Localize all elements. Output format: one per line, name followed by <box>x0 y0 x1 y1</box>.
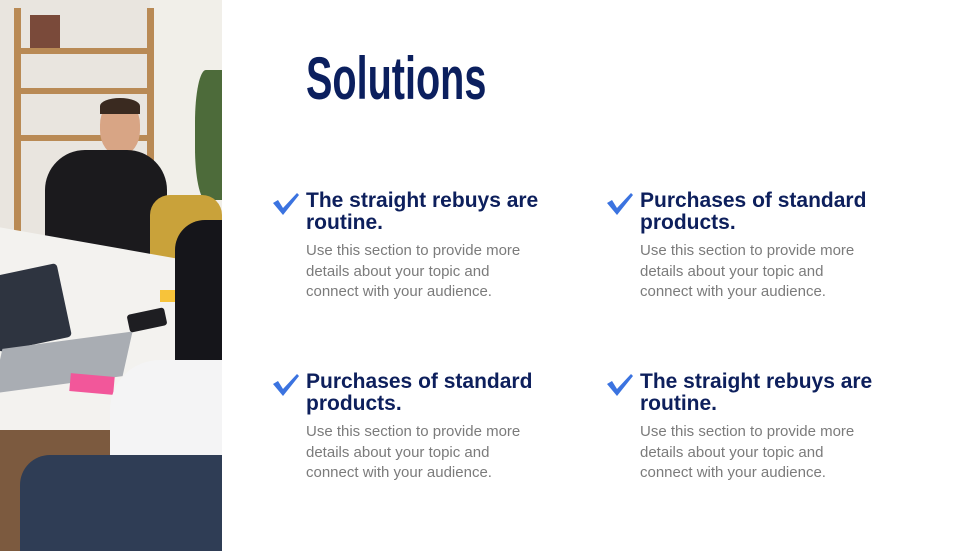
item: top left <box>273 189 538 300</box>
photo: team meeting <box>0 0 222 551</box>
title: Solutions <box>306 45 486 112</box>
item: top left: The straight rebuys are routine. <box>306 189 538 234</box>
item: top right <box>607 189 866 300</box>
item: bottom right: The straight rebuys are routine. <box>640 370 872 415</box>
item: top right: Use this section to provide more details about your topic and connect with your audience. <box>640 242 854 300</box>
item: bottom left <box>273 370 532 481</box>
item: top right: Purchases of standard products. <box>640 189 866 234</box>
icon: check <box>273 374 299 396</box>
icon: check <box>607 374 633 396</box>
item: bottom right: Use this section to provide more details about your topic and connect with your audience. <box>640 423 854 481</box>
icon: check <box>607 193 633 215</box>
item: bottom left: Purchases of standard products. <box>306 370 532 415</box>
icon: check <box>273 193 299 215</box>
item: bottom right <box>607 370 872 481</box>
item: top left: Use this section to provide more details about your topic and connect with your audience. <box>306 242 520 300</box>
item: bottom left: Use this section to provide more details about your topic and connect with your audience. <box>306 423 520 481</box>
